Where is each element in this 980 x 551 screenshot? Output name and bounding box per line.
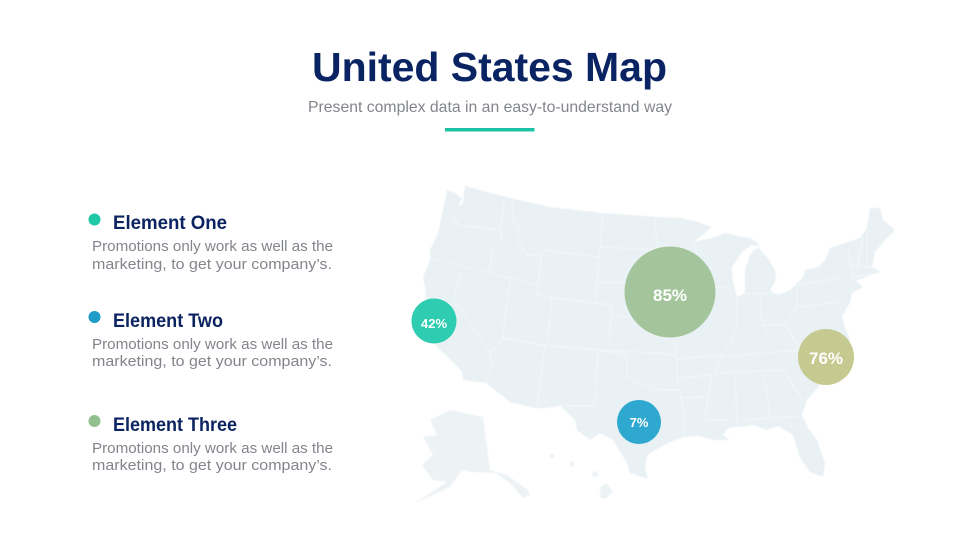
legend item: Element Three	[88, 415, 333, 474]
body text: Element Three: marketing, to get your company’s.	[92, 457, 332, 474]
map of the United States	[415, 186, 895, 503]
legend item: Element One	[88, 213, 333, 273]
bullet: teal	[88, 214, 100, 226]
data bubble: 42%: 42%	[421, 316, 447, 331]
title: United States Map	[312, 44, 667, 90]
legend item: Element Two	[88, 311, 333, 370]
body text: Element One: Promotions only work as well as the	[92, 238, 333, 255]
data bubble: 76%	[798, 329, 854, 385]
body text: Element One: marketing, to get your company’s.	[92, 256, 332, 273]
bullet: blue	[88, 311, 100, 323]
data bubble: 85%	[624, 246, 716, 338]
title underline	[445, 128, 534, 132]
state borders	[430, 198, 877, 437]
heading: Element Three: Element Three	[113, 415, 237, 436]
data bubble: 76%: 76%	[809, 349, 843, 368]
heading: Element One: Element One	[113, 213, 227, 234]
data bubble: 7%	[617, 400, 661, 444]
heading: Element Two: Element Two	[113, 311, 223, 332]
Lake Michigan	[732, 245, 760, 297]
Hawaii	[550, 454, 613, 499]
body text: Element Three	[92, 440, 333, 474]
contiguous states	[423, 186, 895, 479]
data bubble: 85%: 85%	[653, 286, 687, 305]
Alaska	[415, 410, 530, 503]
data bubble: 7%: 7%	[630, 415, 649, 430]
subtitle: Present complex data in an easy-to-understand way	[308, 99, 672, 116]
body text: Element Three: Promotions only work as well as the	[92, 440, 333, 457]
body text: Element One	[92, 238, 333, 273]
bullet: green	[88, 415, 100, 427]
body text: Element Two	[92, 336, 333, 370]
data bubble: 42%	[412, 298, 456, 344]
body text: Element Two: marketing, to get your company’s.	[92, 353, 332, 370]
body text: Element Two: Promotions only work as well as the	[92, 336, 333, 353]
